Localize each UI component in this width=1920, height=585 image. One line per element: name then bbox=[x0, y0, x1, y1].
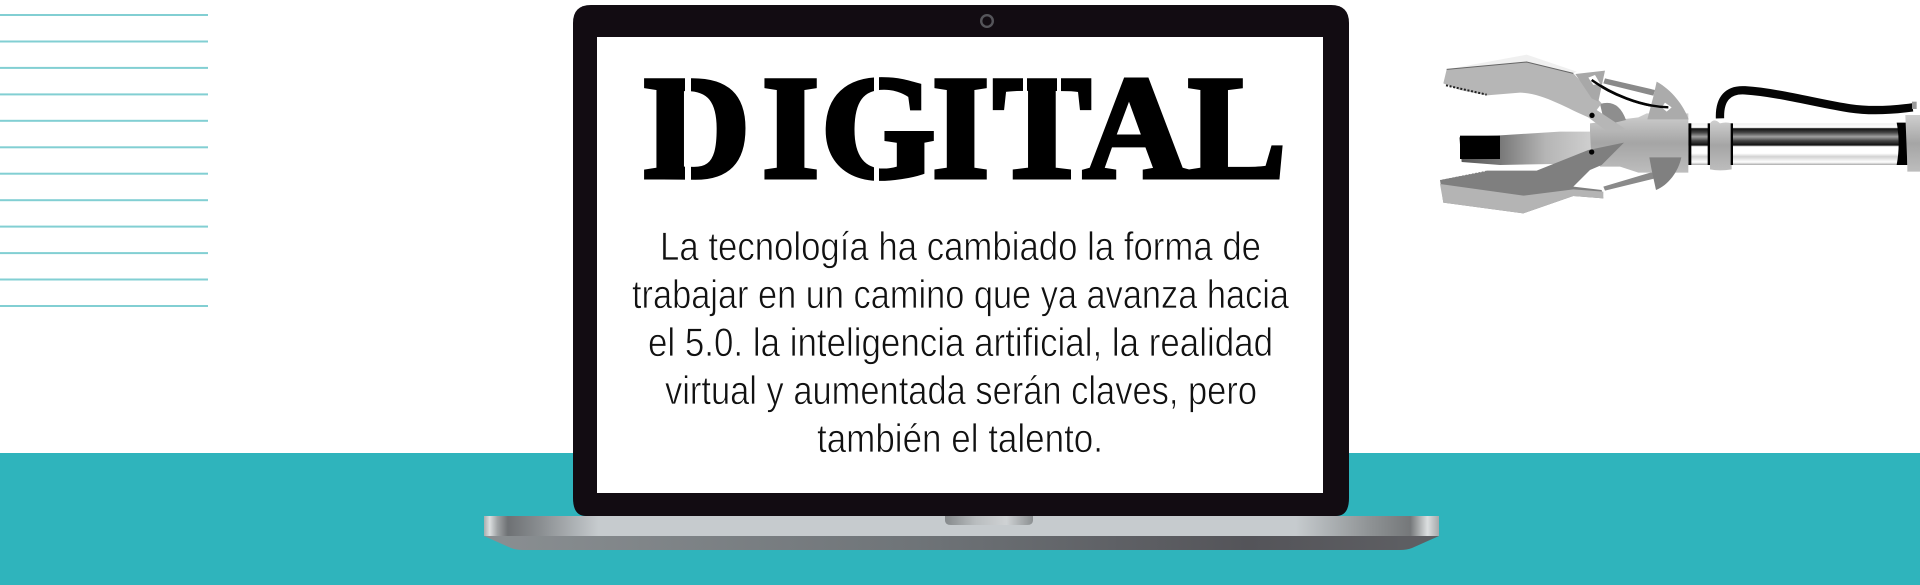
teal ground band bbox=[0, 453, 1920, 585]
lower guard bbox=[1649, 157, 1681, 190]
laptop base bbox=[484, 516, 1439, 550]
tube collar bbox=[1710, 120, 1732, 170]
upper jaw teeth bbox=[1446, 85, 1487, 95]
stencil cuts bbox=[685, 70, 1061, 188]
arm cable bbox=[1720, 90, 1913, 118]
upper guard bbox=[1647, 82, 1689, 119]
decorative horizontal lines bbox=[0, 14, 208, 307]
lower jaw teeth bbox=[1441, 171, 1487, 179]
laptop bbox=[484, 5, 1439, 550]
right clamp bbox=[1897, 123, 1907, 165]
webcam bbox=[981, 15, 993, 27]
body text: el 5.0. la inteligencia artificial, la realidad bbox=[648, 321, 1273, 365]
body text: también el talento. bbox=[817, 417, 1103, 461]
body text bbox=[632, 225, 1289, 461]
laptop screen bbox=[597, 37, 1323, 493]
upper jaw bbox=[1443, 62, 1626, 131]
lower jaw bbox=[1440, 143, 1624, 213]
title: DIGITAL bbox=[644, 46, 1286, 209]
laptop lid bbox=[573, 5, 1349, 516]
body text: virtual y aumentada serán claves, pero bbox=[665, 369, 1257, 413]
body text: La tecnología ha cambiado la forma de bbox=[660, 225, 1261, 269]
arm tube bbox=[1688, 123, 1902, 165]
wrist bbox=[1590, 113, 1688, 173]
robotic arm bbox=[1440, 55, 1920, 213]
body text: trabajar en un camino que ya avanza hacia bbox=[632, 273, 1289, 317]
jaw pivots bbox=[1589, 113, 1595, 118]
middle jaw bbox=[1459, 132, 1592, 165]
upper jaw linkage bbox=[1575, 71, 1605, 102]
tendon rods bbox=[1603, 78, 1655, 96]
